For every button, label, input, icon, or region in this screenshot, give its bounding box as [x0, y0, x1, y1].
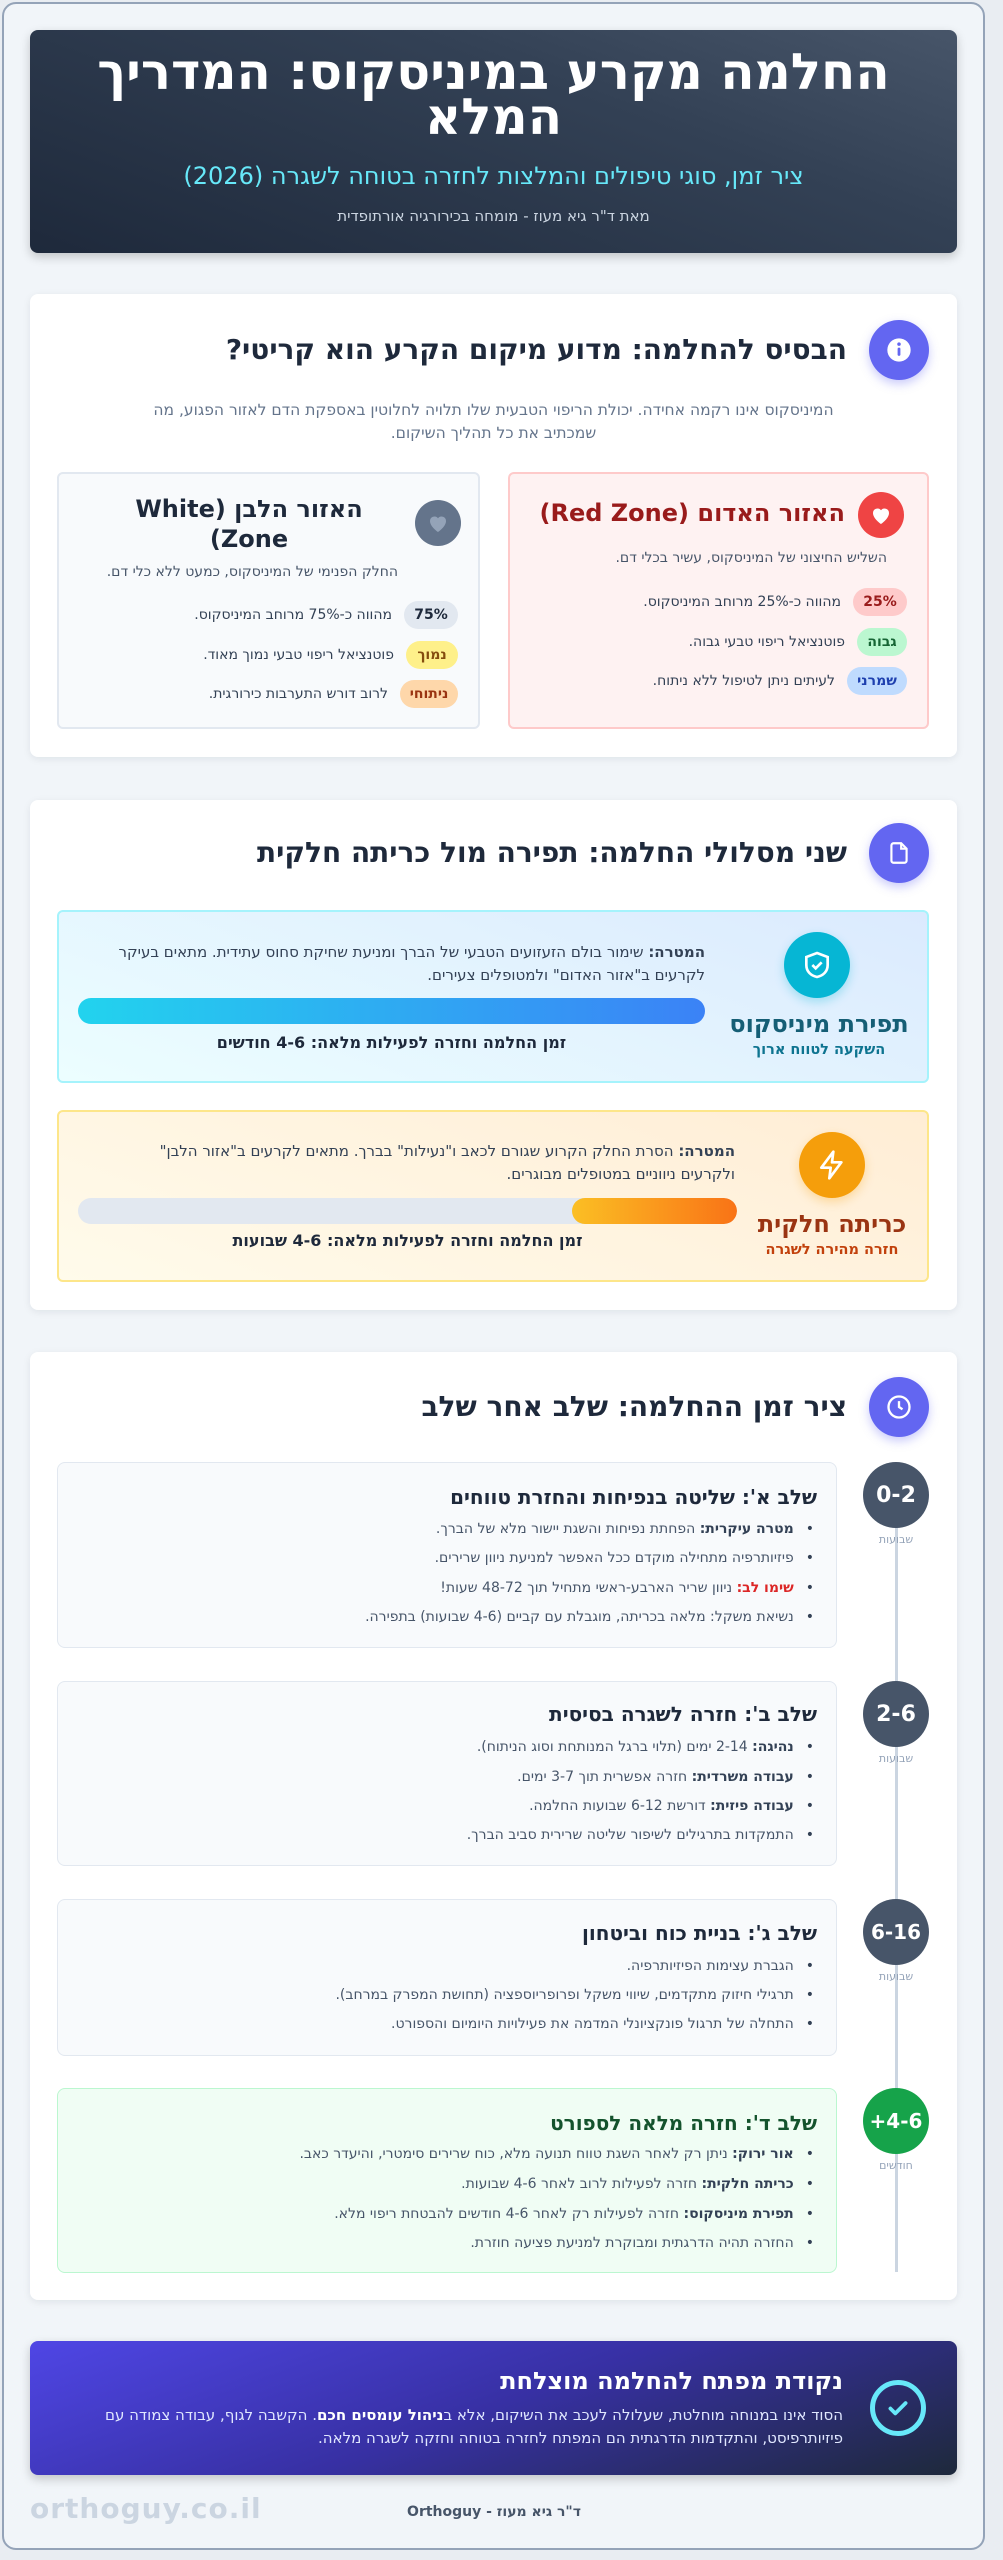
- panel: partial meniscectomy: זמן החלמה וחזרה לפעילות מלאה: 4-6 שבועות: [232, 1231, 582, 1250]
- panel: red zone: שמרני: [857, 673, 897, 689]
- stage A: [57, 1462, 929, 1648]
- stage A: נשיאת משקל: מלאה בכריתה, מוגבלת עם קביים (4-6 שבועות) בתפירה.: [365, 1609, 794, 1625]
- icon: clock: [869, 1377, 929, 1437]
- stage D: [57, 2088, 929, 2273]
- pills red: 25%: [863, 594, 897, 610]
- icon: heart red: [858, 492, 904, 538]
- subtitle: ציר זמן, סוגי טיפולים והמלצות לחזרה בטוחה לשגרה (2026): [183, 162, 804, 190]
- circle 2-6: 2-6: [876, 1702, 916, 1726]
- stage A: פיזיותרפיה מתחילה מוקדם ככל האפשר למניעת ניוון שרירים.: [435, 1550, 794, 1566]
- circle 4-6+: [863, 2088, 929, 2154]
- panel: red zone: [508, 472, 929, 729]
- intro text: המיניסקוס אינו רקמה אחידה. יכולת הריפוי הטבעית שלו תלויה לחלוטין באספקת הדם לאזור הפגוע, מה שמכתיב את כל תהליך השיקום.: [153, 401, 834, 442]
- timeline line: [895, 1495, 898, 2272]
- circle 0-2: 0-2: [876, 1482, 916, 1508]
- header banner: [30, 30, 957, 253]
- panel: timeline: [30, 1352, 957, 2300]
- panel: partial meniscectomy: [57, 1110, 929, 1282]
- title: [97, 43, 890, 146]
- panel: white zone: נמוך: [417, 647, 447, 663]
- title: המלא: [425, 88, 562, 146]
- byline: מאת ד"ר גיא מעוז - מומחה בכירורגיה אורתופדית: [337, 207, 650, 225]
- footer watermark: orthoguy.co.il: [30, 2492, 262, 2525]
- panel: white zone: לרוב דורש התערבות כירורגית.: [209, 686, 388, 702]
- stage D: שלב ד': חזרה מלאה לספורט: [550, 2111, 817, 2135]
- stage C: שלב ג': בניית כוח וביטחון: [582, 1921, 817, 1945]
- stage A: מטרה עיקרית: הפחתת נפיחות והשגת יישור מלא של הברך.: [436, 1521, 794, 1537]
- stage C: תרגילי חיזוק מתקדמים, שיווי משקל ופרופריוספציה (תחושת המפרק במרחב).: [335, 1987, 794, 2003]
- pills red: [853, 588, 907, 616]
- panel: white zone: ניתוחי: [410, 686, 448, 702]
- white desc: החלק הפנימי של המיניסקוס, כמעט ללא כלי דם.: [107, 564, 398, 580]
- heading: שני מסלולי החלמה: תפירה מול כריתה חלקית: [257, 836, 847, 869]
- panel: meniscus repair: השקעה לטווח ארוך: [753, 1042, 885, 1058]
- stage A: שבועות: [879, 1533, 913, 1546]
- icon: document: [869, 823, 929, 883]
- panel: white zone: פוטנציאל ריפוי טבעי נמוך מאוד.: [203, 647, 394, 663]
- stage B: שבועות: [879, 1752, 913, 1765]
- repair title: תפירת מיניסקוס: [729, 1010, 909, 1038]
- stage B: התמקדות בתרגילים לשיפור שליטה שרירית סביב הברך.: [467, 1827, 794, 1843]
- circle 4-6+: +4-6: [870, 2109, 922, 2133]
- pills white: 75%: [414, 607, 448, 623]
- icon: shield: [784, 932, 850, 998]
- stage A: שימו לב: ניוון שריר הארבע-ראשי מתחיל תוך 48-72 שעות!: [440, 1580, 794, 1596]
- pills white: [404, 601, 458, 629]
- circle 6-16: 6-16: [871, 1920, 921, 1944]
- circle 6-16: [863, 1899, 929, 1965]
- panel: meniscus repair: [57, 910, 929, 1083]
- stage D: תפירת מיניסקוס: חזרה לפעילות רק לאחר 4-6 חודשים להבטחת ריפוי מלא.: [334, 2206, 794, 2222]
- bar: 4-6 months: [78, 998, 705, 1024]
- stage D: אור ירוק: ניתן רק לאחר השגת טווח תנועה מלא, כוח שרירים סימטרי, והיעדר כאב.: [299, 2146, 794, 2162]
- icon: info: [869, 320, 929, 380]
- bar: 4-6 weeks: [78, 1198, 737, 1224]
- stage B: נהיגה: 2-14 ימים (תלוי ברגל המנותחת וסוג הניתוח).: [477, 1739, 794, 1755]
- heading: הבסיס להחלמה: מדוע מיקום הקרע הוא קריטי?: [226, 333, 847, 366]
- panel: red zone: לעיתים ניתן לטיפול ללא ניתוח.: [653, 673, 835, 689]
- meniscectomy goal: המטרה: הסרת החלק הקרוע שגורם לכאב ו"נעילות" בברך. מתאים לקרעים ב"אזור הלבן" ולקרעים ניווניים במטופלים מבוגרים.: [160, 1142, 735, 1183]
- panel: white zone: מהווה כ-75% מרוחב המיניסקוס.: [194, 607, 392, 623]
- icon: heart gray: [415, 500, 461, 546]
- callout: key takeaway: [30, 2341, 957, 2475]
- red zone title: האזור האדום (Red Zone): [540, 499, 845, 527]
- stage A: שלב א': שליטה בנפיחות והחזרת טווחים: [450, 1485, 817, 1509]
- panel: partial meniscectomy: חזרה מהירה לשגרה: [766, 1242, 898, 1258]
- stage B: עבודה פיזית: דורשת 6-12 שבועות החלמה.: [529, 1798, 794, 1814]
- title: החלמה מקרע במיניסקוס: המדריך: [97, 43, 890, 101]
- circle 2-6: [863, 1681, 929, 1747]
- panel: meniscus repair: זמן החלמה וחזרה לפעילות מלאה: 4-6 חודשים: [217, 1033, 566, 1052]
- panel: red zone: פוטנציאל ריפוי טבעי גבוה.: [689, 634, 845, 650]
- callout heading: נקודת מפתח להחלמה מוצלחת: [500, 2367, 843, 2395]
- icon: lightning: [799, 1132, 865, 1198]
- panel: two recovery paths: [30, 800, 957, 1310]
- icon: check circle: [870, 2380, 926, 2436]
- callout text: הסוד אינו במנוחה מוחלטת, שעלולה לעכב את השיקום, אלא בניהול עומסים חכם. הקשבה לגוף, עבודה צמודה עם פיזיותרפיסט, והתקדמות הדרגתית הם המפתח לחזרה בטוחה וחזקה לשגרה מלאה.: [105, 2406, 843, 2447]
- stage B: [57, 1681, 929, 1866]
- stage C: הגברת עצימות הפיזיותרפיה.: [627, 1958, 794, 1974]
- repair goal text: המטרה: שימור בולם הזעזועים הטבעי של הברך ומניעת שחיקת סחוס עתידית. מתאים בעיקר לקרעים ב"אזור האדום" ולמטופלים צעירים.: [118, 943, 705, 984]
- panel: white zone: [57, 472, 480, 729]
- circle 0-2: [863, 1462, 929, 1528]
- stage C: התחלה של תרגול פונקציונלי המדמה את פעילויות היומיום והספורט.: [391, 2016, 794, 2032]
- stage B: שלב ב': חזרה לשגרה בסיסית: [549, 1702, 817, 1726]
- panel: red zone: גבוה: [867, 634, 897, 650]
- stage D: חודשים: [879, 2159, 913, 2172]
- stage B: עבודה משרדית: חזרה אפשרית תוך 3-7 ימים.: [517, 1769, 794, 1785]
- stage D: החזרה תהיה הדרגתית ומבוקרת למניעת פציעה חוזרת.: [470, 2235, 794, 2251]
- stage C: שבועות: [879, 1970, 913, 1983]
- stage D: כריתה חלקית: חזרה לפעילות לרוב לאחר 4-6 שבועות.: [461, 2176, 794, 2192]
- stage C: [57, 1899, 929, 2056]
- white zone title: האזור הלבן (White Zone): [135, 495, 363, 553]
- panel: red zone: מהווה כ-25% מרוחב המיניסקוס.: [643, 594, 841, 610]
- meniscectomy title: כריתה חלקית: [758, 1210, 906, 1238]
- red desc: השליש החיצוני של המיניסקוס, עשיר בכלי דם.: [615, 550, 887, 566]
- footer credit: ד"ר גיא מעוז - Orthoguy: [407, 2504, 581, 2520]
- panel: basis / zones: [30, 294, 957, 757]
- heading: ציר זמן ההחלמה: שלב אחר שלב: [421, 1390, 847, 1423]
